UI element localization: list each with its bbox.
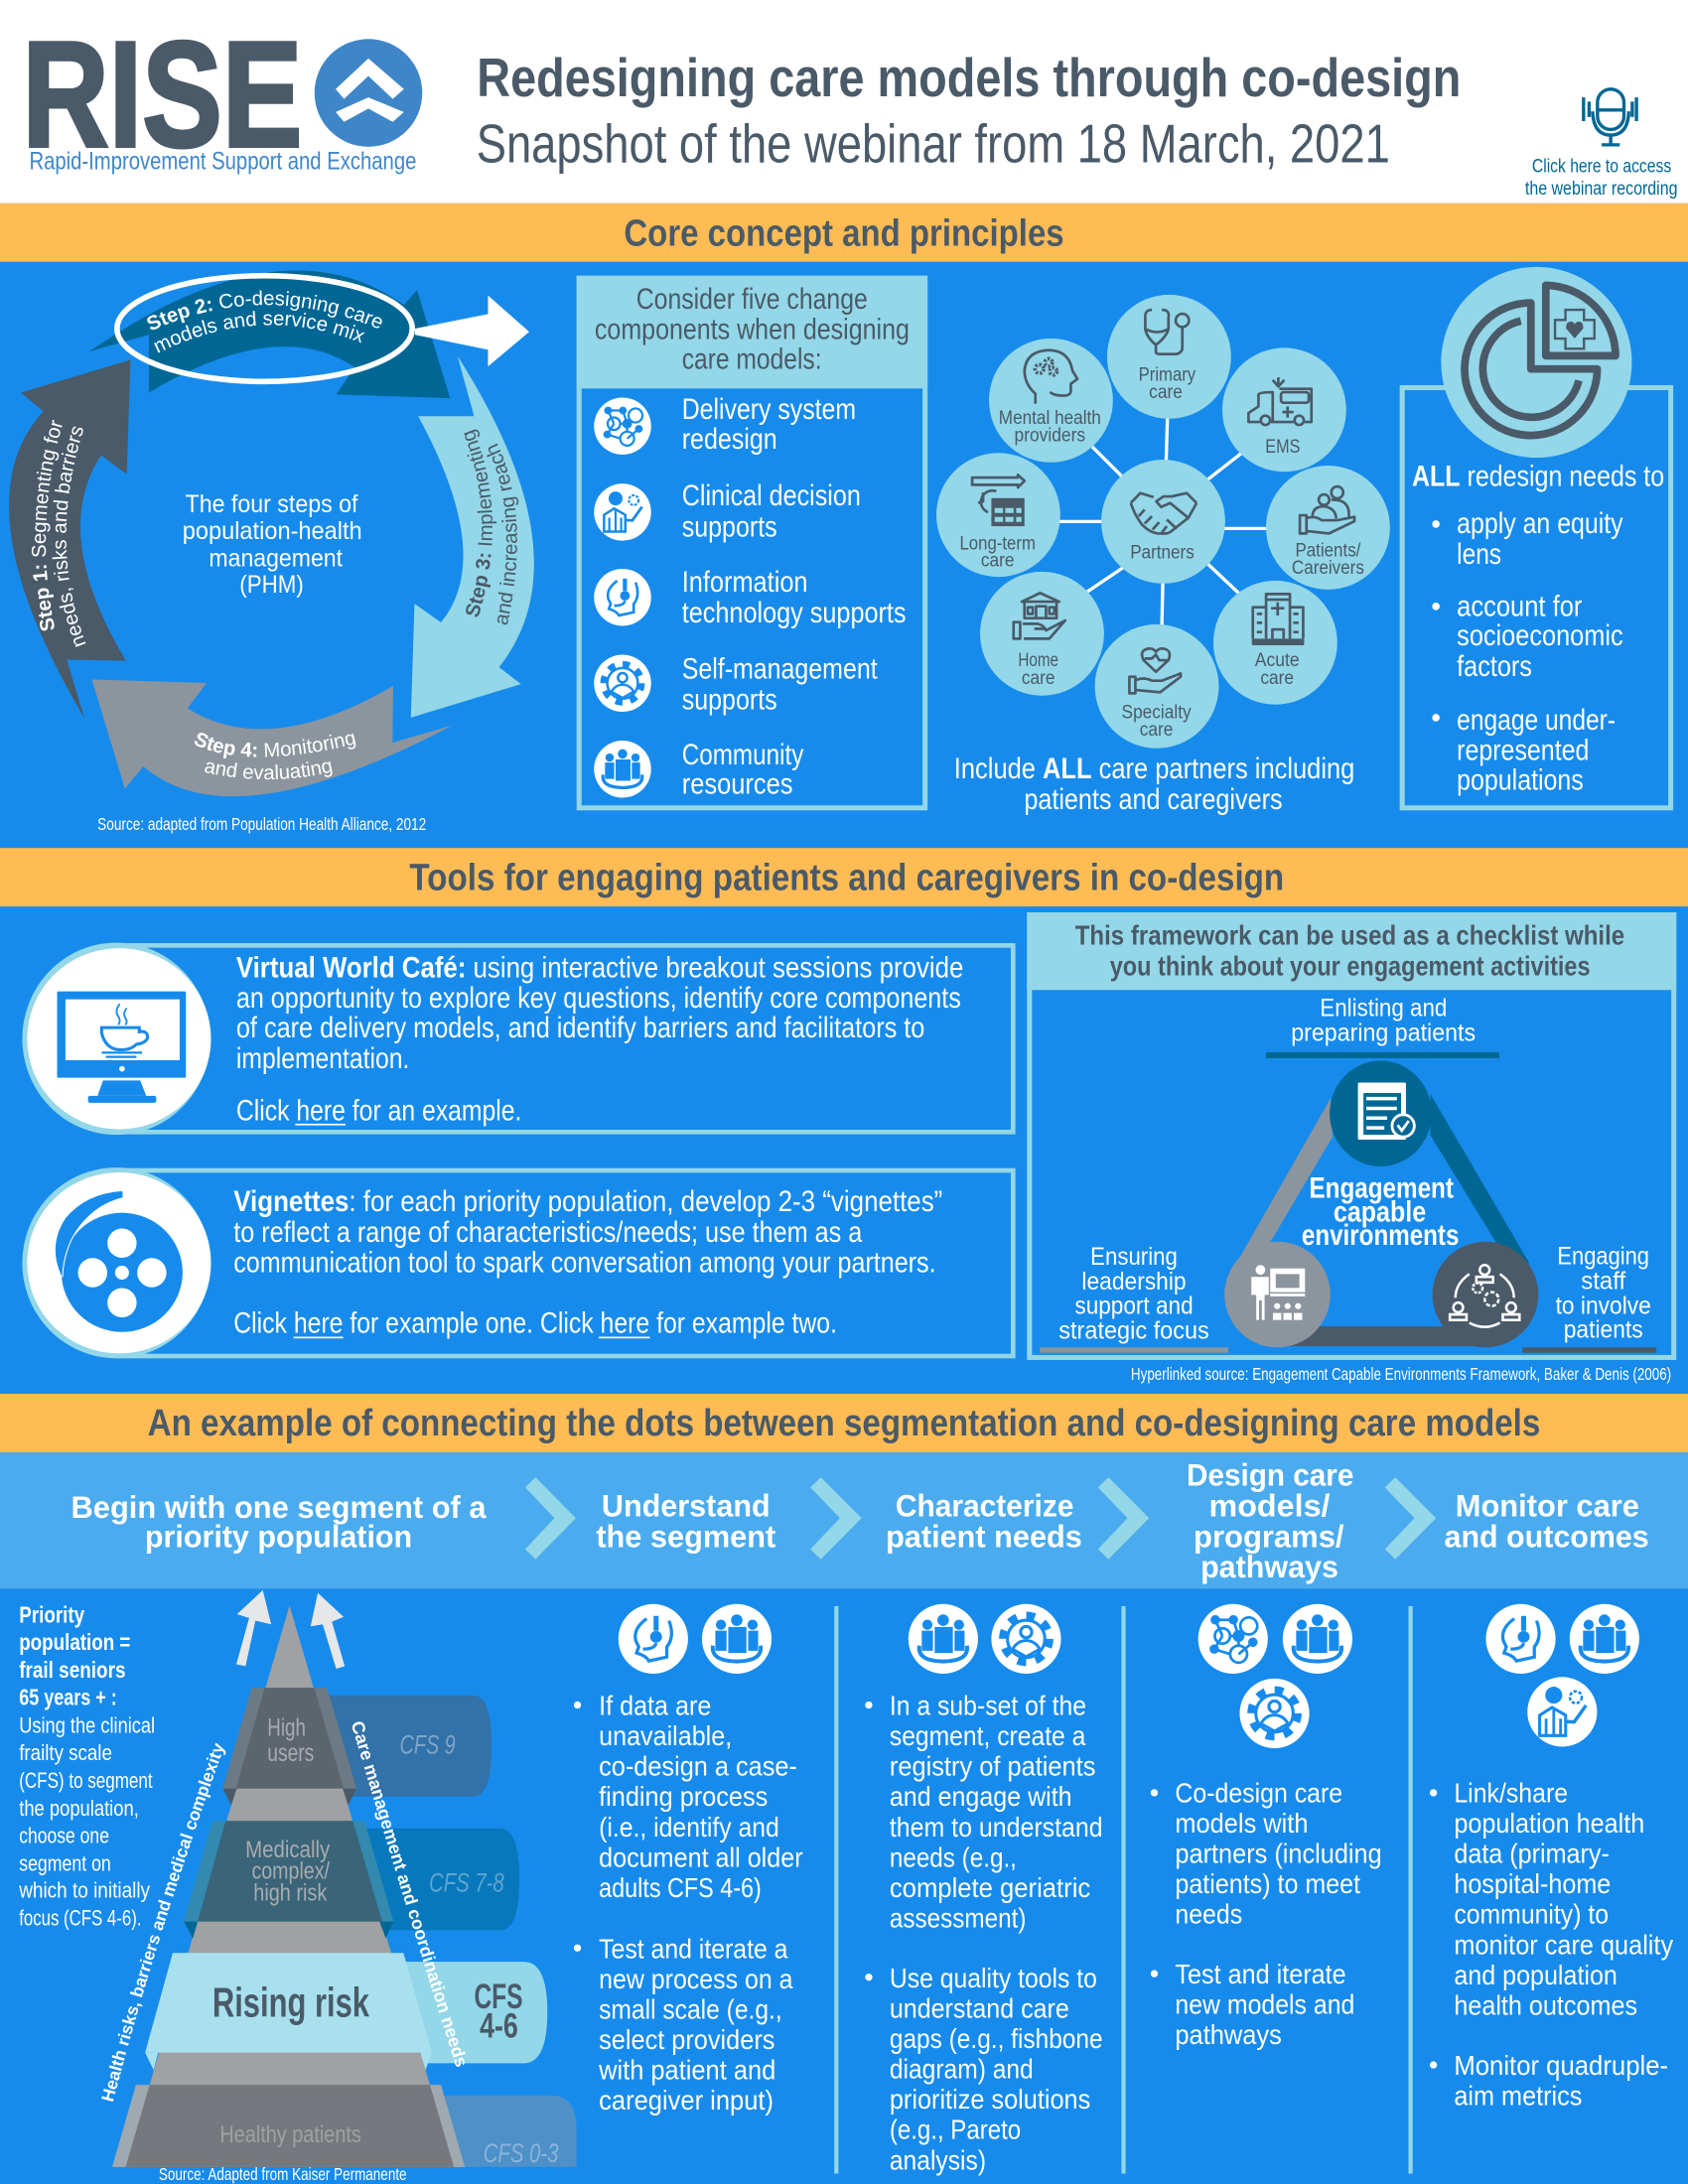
panel heading: you think about your engagement activities xyxy=(1110,950,1591,981)
tier: healthy patients: Healthy patients xyxy=(219,2121,361,2148)
bullet list: finding process xyxy=(599,1781,768,1812)
icons xyxy=(909,1604,1061,1674)
bullet list: pathways xyxy=(1175,2019,1282,2050)
panel: vignettes xyxy=(22,1167,1013,1358)
body text: an opportunity to explore key questions, identify core components xyxy=(236,982,961,1015)
body text xyxy=(233,1185,942,1339)
title: Redesigning care models through co-design xyxy=(477,47,1461,108)
bullet list: adults CFS 4-6) xyxy=(599,1872,762,1903)
panel: all redesign needs xyxy=(1402,267,1671,808)
bullet list: gaps (e.g., fishbone xyxy=(890,2023,1103,2054)
item: clinical decision supports xyxy=(594,479,861,543)
item: delivery system redesign xyxy=(594,393,856,456)
label: ensuring leadership: Ensuring xyxy=(1090,1243,1178,1271)
node: specialty care: Specialty xyxy=(1122,702,1192,724)
step: design care models: programs/ xyxy=(1194,1518,1344,1554)
icon: microphone xyxy=(1584,89,1636,145)
pyramid body xyxy=(126,1605,454,2167)
item: delivery system redesign: Delivery system xyxy=(682,393,856,426)
arrow: step 1 xyxy=(9,359,131,719)
item: delivery system redesign: redesign xyxy=(682,423,777,456)
panel heading xyxy=(1075,920,1624,981)
source note: Source: adapted from Population Health Alliance, 2012 xyxy=(97,814,426,834)
node: mental health providers: providers xyxy=(1015,424,1085,446)
node: partners xyxy=(1101,460,1225,584)
RISE logo: RISE xyxy=(22,11,302,179)
caption: include all care partners xyxy=(954,752,1354,816)
arrow: step 1: Step 1: Segmenting for xyxy=(32,419,63,631)
bullet list: models with xyxy=(1175,1808,1308,1839)
tab: CFS 4-6: 4-6 xyxy=(480,2007,518,2046)
priority population text: population = xyxy=(19,1629,130,1655)
care partners hub diagram xyxy=(936,295,1390,816)
node: acute care: care xyxy=(1260,667,1294,689)
bullet list: community) to xyxy=(1454,1899,1609,1930)
bullet list: socioeconomic xyxy=(1457,619,1623,652)
bullet list: apply an equity xyxy=(1457,507,1623,540)
item: community resources: resources xyxy=(682,767,793,800)
arrow: chevron 2 xyxy=(810,1477,862,1560)
bullet list: In a sub-set of the xyxy=(890,1690,1086,1720)
RISE logo: Rapid-Improvement Support and Exchange xyxy=(29,148,416,176)
centre label: Engagement xyxy=(1309,1172,1454,1205)
arrow: out to co-design xyxy=(415,296,529,366)
bullet list: small scale (e.g., xyxy=(599,1994,782,2025)
priority population text: frail seniors xyxy=(19,1657,126,1683)
bullet list: partners (including xyxy=(1175,1839,1382,1869)
icons xyxy=(1198,1604,1352,1748)
tier: high users xyxy=(222,1688,356,1805)
label: enlisting and preparing patients: preparing patients xyxy=(1291,1019,1476,1046)
bullet list: and engage with xyxy=(890,1781,1072,1812)
icon: checklist xyxy=(1358,1083,1414,1140)
tier: medically complex xyxy=(184,1821,393,1938)
arrow: step 1: needs, risks and barriers xyxy=(52,427,85,647)
bullet list: registry of patients xyxy=(890,1751,1095,1782)
node: long-term care: care xyxy=(981,550,1015,572)
section band: connecting the dots xyxy=(0,1394,1688,1452)
bullet list: Test and iterate xyxy=(1175,1959,1346,1989)
node: acute care xyxy=(1213,581,1337,705)
column: characterize patient needs xyxy=(865,1604,1103,2175)
label: engaging staff: Engaging xyxy=(1557,1243,1649,1271)
bullet list: understand care xyxy=(890,1992,1069,2023)
centre label: environments xyxy=(1302,1219,1459,1252)
panel: virtual world cafe xyxy=(22,943,1013,1135)
bullet list: Co-design care xyxy=(1175,1777,1342,1808)
node: home care xyxy=(980,572,1104,696)
label: engaging staff: patients xyxy=(1564,1316,1643,1344)
arrow: step 3 xyxy=(411,355,534,718)
bullet list: and population xyxy=(1454,1960,1618,1990)
bullet list: Use quality tools to xyxy=(890,1963,1097,1993)
item: community resources: Community xyxy=(682,739,804,771)
tier: high users: High xyxy=(267,1714,306,1741)
bullet list: new models and xyxy=(1175,1989,1354,2020)
priority population text: segment on xyxy=(19,1851,111,1876)
step: monitor care and outcomes: Monitor care xyxy=(1456,1487,1639,1523)
bullet list: aim metrics xyxy=(1454,2080,1582,2111)
node: partners: Partners xyxy=(1130,541,1195,563)
priority population text: choose one xyxy=(19,1823,109,1847)
bullet list xyxy=(574,1690,803,2116)
tab: CFS 9: CFS 9 xyxy=(400,1729,456,1759)
bullet list: diagram) and xyxy=(890,2054,1034,2085)
step: monitor care and outcomes xyxy=(1445,1487,1649,1554)
body text: of care delivery models, and identify barriers and facilitators to xyxy=(236,1012,924,1044)
bullet list xyxy=(865,1690,1103,2175)
arrow: step 4: and evaluating xyxy=(205,761,333,780)
body text: Virtual World Café: using interactive breakout sessions provide xyxy=(236,951,963,984)
subtitle: Snapshot of the webinar from 18 March, 2021 xyxy=(477,112,1390,174)
bullet list: hospital-home xyxy=(1454,1868,1611,1899)
item: information technology supports: technology supports xyxy=(682,597,907,629)
section band: tools xyxy=(0,848,1688,906)
tier: medically complex: complex/ xyxy=(251,1858,330,1885)
bullet list: (i.e., identify and xyxy=(599,1812,779,1843)
arrow: chevron 3 xyxy=(1098,1477,1149,1560)
column: understand the segment xyxy=(574,1604,803,2116)
process header band xyxy=(0,1452,1688,1588)
arrow: step 3: Step 3: Implementing xyxy=(464,429,496,617)
bullet list: Test and iterate a xyxy=(599,1933,788,1964)
step: characterize patient needs: Characterize xyxy=(896,1487,1073,1523)
panel heading: components when designing xyxy=(595,314,910,346)
item: self-management supports xyxy=(594,652,878,717)
node: home care: care xyxy=(1022,667,1055,689)
panel: engagement capable environments framework xyxy=(1027,912,1676,1357)
arrow: step 4 xyxy=(91,679,453,796)
tab: CFS 7-8: CFS 7-8 xyxy=(429,1867,504,1897)
priority population text: Using the clinical xyxy=(19,1712,155,1737)
node: specialty care: care xyxy=(1140,719,1174,741)
tier: rising risk: Rising risk xyxy=(212,1979,369,2026)
bullet list: (e.g., Pareto xyxy=(890,2115,1021,2145)
priority population text: (CFS) to segment xyxy=(19,1768,153,1793)
priority population text: frailty scale xyxy=(19,1740,112,1765)
priority population text: Priority xyxy=(19,1601,84,1627)
bullet list: health outcomes xyxy=(1454,1989,1637,2020)
bullet list: populations xyxy=(1457,764,1584,797)
bullet list: document all older xyxy=(599,1842,803,1872)
icon: team gears xyxy=(1450,1265,1519,1327)
panel heading xyxy=(595,283,910,376)
panel heading: care models: xyxy=(682,343,822,376)
bullet list: analysis) xyxy=(890,2144,986,2175)
step: design care models: Design care xyxy=(1187,1457,1353,1493)
source note: Source: Adapted from Kaiser Permanente xyxy=(159,2164,407,2184)
node: primary care: care xyxy=(1149,381,1183,403)
item: self-management supports: supports xyxy=(682,684,777,717)
population pyramid xyxy=(101,1590,577,2184)
label: engaging staff xyxy=(1522,1243,1656,1353)
arrow: upward right xyxy=(311,1593,345,1669)
bullet list: Link/share xyxy=(1454,1777,1568,1808)
step: begin with one segment: priority population xyxy=(145,1518,412,1554)
arrow: chevron 1 xyxy=(525,1477,576,1560)
bullet list: complete geriatric xyxy=(890,1872,1090,1903)
item: clinical decision supports: Clinical decision xyxy=(682,479,861,512)
column: design care models xyxy=(1151,1604,1382,2050)
bullet list: represented xyxy=(1457,734,1589,766)
cycle diagram: four steps xyxy=(9,270,534,834)
node: patients and caregivers: Careivers xyxy=(1292,557,1364,579)
arrow: step 2 xyxy=(89,270,451,399)
arrow: step 4: Step 4: Monitoring xyxy=(195,733,355,758)
bullet list xyxy=(1430,1777,1673,2111)
icon: film reel xyxy=(56,1191,183,1332)
node: long-term care: Long-term xyxy=(959,533,1036,555)
label: engaging staff: staff xyxy=(1581,1267,1626,1295)
bullet list: prioritize solutions xyxy=(890,2084,1090,2115)
label: ensuring leadership: leadership xyxy=(1081,1268,1187,1296)
bullet list: engage under- xyxy=(1457,704,1616,737)
bullet list: needs (e.g., xyxy=(890,1842,1017,1872)
label: enlisting and preparing patients: Enlisting and xyxy=(1320,994,1447,1022)
centre text: PHM: (PHM) xyxy=(239,571,304,599)
step: understand the segment xyxy=(596,1487,776,1554)
step: monitor care and outcomes: and outcomes xyxy=(1445,1518,1649,1554)
centre text: PHM: The four steps of xyxy=(186,490,358,518)
label: engaging staff: to involve xyxy=(1556,1292,1651,1319)
item: community resources xyxy=(594,739,804,800)
priority population text: which to initially xyxy=(18,1878,151,1903)
priority population text: focus (CFS 4-6). xyxy=(19,1905,142,1930)
node: acute care: Acute xyxy=(1255,649,1300,671)
header xyxy=(0,0,1688,204)
bullet list xyxy=(1151,1777,1382,2050)
body text xyxy=(236,951,963,1127)
bullet list: select providers xyxy=(599,2024,774,2055)
bullet list: them to understand xyxy=(890,1812,1103,1843)
bullet list: co-design a case- xyxy=(599,1751,797,1782)
item: information technology supports: Information xyxy=(682,566,808,599)
item: self-management supports: Self-management xyxy=(682,652,878,685)
tier: healthy patients xyxy=(112,2085,465,2167)
tier: medically complex: Medically xyxy=(245,1837,330,1863)
arrow: step 2: Step 2: Co-designing care xyxy=(147,290,382,330)
bullet list: with patient and xyxy=(598,2055,775,2086)
step: begin with one segment: Begin with one segment of a xyxy=(71,1489,487,1525)
bullet list: factors xyxy=(1457,650,1532,683)
node: primary care: Primary xyxy=(1139,363,1196,385)
arrow: step 2: models and service mix xyxy=(154,311,365,353)
item: clinical decision supports: supports xyxy=(682,510,777,543)
bullet list xyxy=(1432,507,1623,797)
bullet list: patients) to meet xyxy=(1175,1868,1360,1899)
node: specialty care xyxy=(1095,624,1218,749)
centre label xyxy=(1302,1172,1459,1252)
triangle diagram xyxy=(1224,1060,1538,1347)
body text: Vignettes: for each priority population, develop 2-3 “vignettes” xyxy=(233,1185,942,1218)
bullet list: unavailable, xyxy=(599,1720,732,1751)
section band: core concept: Core concept and principles xyxy=(624,213,1064,255)
bullet list: needs xyxy=(1175,1899,1242,1930)
curved label: care management: Care management and coordination needs xyxy=(352,1721,466,2067)
node: EMS: EMS xyxy=(1265,436,1300,458)
node: patients and caregivers: Patients/ xyxy=(1295,539,1361,561)
arrow: step 3: and increasing reach xyxy=(487,443,518,625)
label: enlisting and preparing patients xyxy=(1266,994,1499,1058)
centre text: PHM: management xyxy=(209,545,343,573)
node: patients and caregivers xyxy=(1266,466,1390,590)
bullet list: data (primary- xyxy=(1454,1839,1610,1869)
label: ensuring leadership xyxy=(1040,1243,1228,1353)
column: monitor care and outcomes xyxy=(1430,1604,1673,2111)
bullet list: lens xyxy=(1457,538,1501,571)
tab: CFS 4-6 xyxy=(404,1962,547,2063)
step: begin with one segment xyxy=(71,1489,487,1554)
tab: CFS 4-6: CFS xyxy=(474,1978,523,2016)
centre text: PHM: population-health xyxy=(183,517,362,545)
bullet list: caregiver input) xyxy=(599,2085,774,2116)
step: design care models: pathways xyxy=(1200,1549,1338,1584)
bullet list: Monitor quadruple- xyxy=(1454,2050,1668,2081)
step: design care models: models/ xyxy=(1208,1487,1331,1523)
label: ensuring leadership: strategic focus xyxy=(1058,1316,1209,1344)
centre label: capable xyxy=(1334,1196,1426,1229)
node: long-term care xyxy=(936,453,1060,577)
label: ensuring leadership: support and xyxy=(1074,1292,1194,1319)
bullet list: population health xyxy=(1454,1808,1644,1839)
body text: Click here for example one. Click here for example two. xyxy=(233,1306,837,1339)
tier: rising risk xyxy=(145,1953,432,2070)
section band: core concept xyxy=(0,204,1688,262)
section band: tools: Tools for engaging patients and caregivers in co-design xyxy=(409,857,1284,898)
arrow: upward left xyxy=(236,1590,271,1666)
node: mental health providers xyxy=(989,339,1113,463)
tab: CFS 0-3 xyxy=(443,2096,577,2168)
priority population text: 65 years + : xyxy=(19,1685,117,1710)
bullet list: segment, create a xyxy=(890,1720,1086,1751)
tab: CFS 9 xyxy=(328,1696,492,1797)
caption: include all care partners: patients and caregivers xyxy=(1024,783,1283,816)
node: EMS xyxy=(1222,347,1346,472)
panel heading: Consider five change xyxy=(636,283,868,316)
priority population text xyxy=(18,1601,155,1930)
caption: include all care partners: Include ALL care partners including xyxy=(954,752,1354,785)
priority population text: the population, xyxy=(19,1796,139,1821)
body text: to reflect a range of characteristics/needs; use them as a xyxy=(233,1216,863,1249)
item: information technology supports xyxy=(594,566,907,629)
node: mental health providers: Mental health xyxy=(999,407,1101,429)
curved label: health risks: Health risks, barriers and medical complexity xyxy=(101,1742,226,2102)
body text: communication tool to spark conversation among your partners. xyxy=(233,1247,936,1280)
tier: high users: users xyxy=(267,1740,314,1767)
bullet list: new process on a xyxy=(599,1964,793,1994)
tab: CFS 7-8 xyxy=(364,1829,519,1930)
tier: medically complex: high risk xyxy=(253,1880,327,1907)
step: understand the segment: the segment xyxy=(596,1518,776,1554)
bullet list: If data are xyxy=(599,1690,711,1720)
icons xyxy=(619,1604,772,1674)
node: home care: Home xyxy=(1018,649,1058,671)
body text: Click here for an example. xyxy=(236,1094,521,1127)
step: design care models xyxy=(1187,1457,1353,1584)
arrow: chevron 4 xyxy=(1385,1477,1436,1560)
step: understand the segment: Understand xyxy=(602,1487,771,1523)
tab: CFS 0-3: CFS 0-3 xyxy=(484,2138,559,2168)
panel: five change components xyxy=(577,276,927,808)
node: primary care xyxy=(1107,295,1231,419)
icon: monitor with coffee xyxy=(58,992,186,1103)
icon: presenter xyxy=(1251,1265,1305,1320)
bullet list: account for xyxy=(1457,591,1583,623)
step: characterize patient needs: patient needs xyxy=(886,1518,1082,1554)
webinar link xyxy=(1525,156,1677,200)
step: characterize patient needs xyxy=(886,1487,1082,1554)
body text: implementation. xyxy=(236,1042,409,1075)
icons xyxy=(1485,1604,1639,1746)
icon: pie chart with health cross xyxy=(1441,267,1631,458)
bullet list: assessment) xyxy=(890,1902,1026,1933)
centre text: PHM xyxy=(183,490,362,599)
